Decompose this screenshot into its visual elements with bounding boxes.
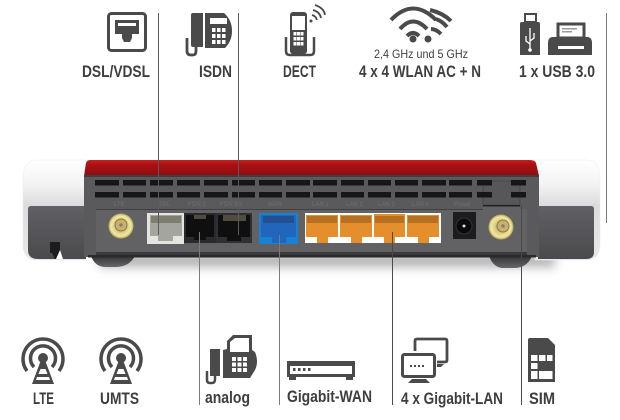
icon: switch box: [287, 361, 355, 380]
left white cap: [23, 160, 85, 260]
rear body: [84, 175, 539, 257]
item: analog: [205, 335, 257, 407]
port: antenna right: [488, 214, 514, 240]
item: ISDN: [187, 13, 232, 81]
item: DECT: [283, 5, 325, 81]
icon: SIM card: [528, 338, 555, 382]
leader line: ISDN: [238, 13, 239, 235]
label: DECT: [283, 63, 316, 81]
faint port captions: WAN: [268, 202, 282, 208]
SIM slot cover: [483, 181, 520, 205]
port: power: [453, 212, 476, 239]
label: LTE: [33, 390, 54, 408]
right white cap: [535, 160, 600, 260]
item: 4 x Gigabit-LAN: [401, 339, 503, 408]
right foot: [489, 256, 532, 268]
label: 1 x USB 3.0: [519, 63, 595, 81]
faint port captions: FON 2: [188, 202, 206, 208]
router: [23, 160, 600, 268]
faint port captions: LAN 2: [346, 202, 363, 208]
port: ISDN 1: [184, 213, 217, 243]
item: DSL/VDSL: [82, 14, 150, 81]
item: LTE: [23, 339, 63, 408]
icon: USB stick: [520, 14, 540, 55]
bottom edge: [88, 255, 536, 258]
leader line: USB: [606, 13, 607, 223]
label: analog: [205, 389, 250, 407]
leader line: analog: [199, 232, 200, 405]
port: LTE antenna: [108, 214, 134, 238]
item: USB: [519, 14, 595, 81]
label: ISDN: [199, 63, 232, 81]
leader line: SIM: [521, 205, 522, 405]
label: Gigabit-WAN: [287, 388, 372, 406]
icon: ethernet socket: [108, 14, 146, 50]
icon: cordless phone: [286, 5, 325, 55]
faint port captions: DSL: [158, 202, 170, 208]
LAN 3: [374, 214, 405, 243]
item: UMTS: [100, 339, 141, 408]
label: UMTS: [100, 390, 139, 408]
icon: desk phone: [187, 13, 232, 55]
left foot: [91, 256, 135, 267]
faint port captions: LAN 4: [412, 202, 429, 208]
port: WAN: [259, 213, 298, 244]
right dark side block: [538, 206, 594, 259]
icon: antenna tower: [101, 339, 141, 384]
leader line: WAN: [279, 235, 280, 405]
icon: double wifi: [391, 8, 451, 40]
port: DSL: [147, 213, 184, 244]
floor shadow: [100, 254, 555, 267]
top strip: [84, 175, 539, 177]
label: 4 x Gigabit-LAN: [401, 390, 503, 408]
faint port captions: LAN 1: [312, 202, 329, 208]
item: Gigabit-WAN: [287, 361, 372, 406]
LAN 2: [340, 215, 372, 243]
LAN 4: [407, 215, 439, 243]
port: LAN group: [305, 213, 441, 243]
port panel: [96, 206, 527, 254]
label: 4 x 4 WLAN AC + N: [359, 63, 481, 81]
red top: [84, 160, 539, 176]
leader line: LAN: [392, 232, 393, 405]
frequency note: 2,4 GHz und 5 GHz: [374, 47, 468, 61]
LAN 1: [306, 215, 338, 243]
vent slots: [95, 180, 526, 198]
label: DSL/VDSL: [82, 63, 150, 81]
faint port captions: FON S0: [220, 202, 242, 208]
faint port captions: Power: [454, 202, 471, 208]
port: ISDN 2: [216, 213, 252, 243]
icon: printer: [548, 24, 592, 55]
item: SIM: [528, 338, 555, 408]
icon: two monitors: [402, 339, 447, 383]
faint port captions: [114, 202, 471, 208]
left cap notch: [50, 242, 63, 259]
icon: antenna tower: [23, 339, 63, 384]
leader line: DSL: [158, 13, 159, 235]
faint port captions: LAN 3: [378, 202, 395, 208]
left dark side block: [28, 206, 86, 259]
icon: fax: [207, 335, 257, 383]
label: SIM: [529, 390, 555, 408]
item: WLAN: [359, 8, 481, 81]
faint port captions: LTE: [114, 202, 125, 208]
